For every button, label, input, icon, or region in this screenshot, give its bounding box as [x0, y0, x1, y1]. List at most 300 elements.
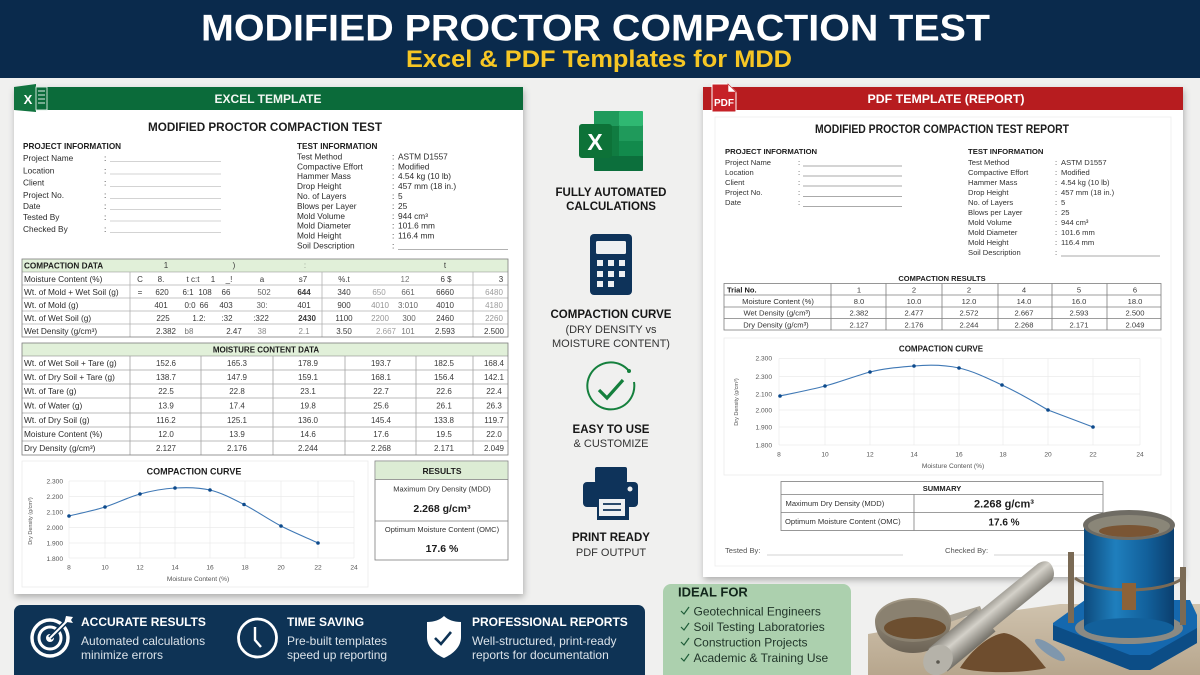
- moisture content table: 145.4: [371, 416, 392, 425]
- pdf project information: :: [798, 188, 800, 197]
- test information block: Compactive Effort: [297, 162, 363, 172]
- pdf test information: Soil Description: [968, 248, 1021, 257]
- pdf test information: Compactive Effort: [968, 168, 1029, 177]
- feature: compaction curve: [551, 234, 672, 350]
- benefit: time saving: [287, 615, 387, 662]
- pdf compaction results table: 2.572: [959, 308, 979, 318]
- pdf test information: Mold Diameter: [968, 228, 1018, 237]
- pdf test information: :: [1055, 178, 1057, 187]
- benefit: professional reports: reports for documentation: [472, 648, 609, 662]
- moisture content table: 25.6: [373, 402, 389, 410]
- rammer: [917, 561, 1054, 675]
- benefit: professional reports: [472, 615, 628, 662]
- compaction data table: 6 $: [440, 275, 452, 284]
- moisture content table: 22.8: [229, 387, 245, 396]
- chart: pdf compaction curve: 1.900: [755, 424, 772, 432]
- test information block: Modified: [398, 162, 430, 172]
- pdf compaction results table: Wet Density (g/cm³): [744, 308, 811, 318]
- moisture content table: 142.1: [484, 373, 505, 382]
- moisture content table: 138.7: [156, 373, 177, 382]
- compaction data table: 3: [499, 275, 504, 284]
- compaction data table: 300: [402, 314, 416, 323]
- compaction data table: 30:: [256, 301, 268, 310]
- compaction data table: Wt. of Wet Soil (g): [24, 313, 91, 323]
- moisture content table: 22.7: [373, 387, 389, 396]
- compaction data table: 2.382: [156, 327, 177, 336]
- feature: fully automated calculations: [556, 111, 666, 213]
- chart: excel compaction curve: 1.800: [46, 556, 63, 563]
- icon: printer: [583, 467, 638, 520]
- test information block: :: [392, 171, 394, 181]
- chart: excel compaction curve: 2.200: [46, 494, 63, 501]
- pdf test information: Mold Height: [968, 238, 1009, 247]
- compaction data table: %.t: [338, 275, 351, 284]
- pdf compaction results table: 2.244: [959, 320, 979, 330]
- compaction data table: 8.: [158, 275, 164, 284]
- pdf compaction results table: 5: [1077, 286, 1081, 294]
- compaction data table: ): [233, 261, 236, 270]
- moisture content table: 2.171: [434, 444, 455, 453]
- compaction data table: COMPACTION DATA: [24, 262, 103, 270]
- pdf compaction results table: 12.0: [962, 297, 976, 306]
- label: fully automated: FULLY AUTOMATED: [556, 187, 666, 199]
- pdf compaction results table: 6: [1133, 286, 1137, 294]
- project information block: Date: [23, 201, 41, 211]
- subtitle: Excel & PDF Templates for MDD: [406, 46, 792, 73]
- pdf test information: 5: [1061, 198, 1065, 207]
- moisture content table: [22, 343, 508, 455]
- compaction data table: b8: [185, 327, 194, 336]
- pdf project information: :: [798, 178, 800, 187]
- compaction data table: 620: [155, 288, 169, 297]
- pdf project information: Client: [725, 178, 745, 187]
- icon: target: [32, 616, 73, 656]
- moisture content table: 147.9: [227, 373, 248, 382]
- moisture content table: Moisture Content (%): [24, 429, 103, 439]
- chart: pdf compaction curve: 2.100: [755, 392, 772, 398]
- pdf test information: Blows per Layer: [968, 208, 1023, 217]
- project information block: Tested By: [23, 212, 60, 222]
- moisture content table: 168.1: [371, 373, 392, 382]
- excel panel header: EXCEL TEMPLATE: [214, 92, 322, 106]
- ideal for heading: IDEAL FOR: [678, 584, 748, 600]
- compaction data table: 661: [401, 288, 415, 297]
- compaction data table: 108: [198, 288, 212, 297]
- label: easy to use: & CUSTOMIZE: [574, 438, 648, 450]
- chart: pdf compaction curve: 2.300: [755, 356, 772, 362]
- project information block: :: [104, 153, 106, 163]
- pdf compaction results table: 2.667: [1014, 308, 1034, 318]
- chart: excel compaction curve: 20: [277, 564, 285, 572]
- pdf test information: :: [1055, 168, 1057, 177]
- project information block: Project No.: [23, 190, 64, 200]
- label: compaction curve: (DRY DENSITY vs: [565, 324, 657, 336]
- icon: clock: [238, 619, 276, 657]
- moisture content table: 182.5: [434, 359, 455, 368]
- moisture content table: MOISTURE CONTENT DATA: [213, 346, 319, 354]
- pdf compaction results table: 2.171: [1069, 320, 1089, 330]
- pdf signature lines: [725, 546, 1090, 555]
- pdf compaction results table: 10.0: [907, 297, 921, 306]
- moisture content table: Wt. of Tare (g): [24, 386, 77, 396]
- moisture content table: 133.8: [434, 416, 455, 425]
- pdf test information: :: [1055, 188, 1057, 197]
- moisture content table: 156.4: [434, 373, 455, 382]
- pdf panel header: PDF TEMPLATE (REPORT): [868, 92, 1025, 106]
- chart: excel compaction curve: 12: [136, 564, 144, 572]
- test information block: 944 cm³: [398, 211, 428, 221]
- pdf compaction results table: 8.0: [854, 297, 864, 306]
- moisture content table: 22.5: [158, 387, 174, 396]
- pdf compaction results table: 2.500: [1125, 308, 1145, 318]
- chart: pdf compaction curve: 12: [866, 452, 874, 458]
- moisture content table: 14.6: [300, 430, 316, 439]
- test information block: :: [392, 162, 394, 172]
- excel panel header: [14, 87, 523, 110]
- chart: excel compaction curve: 18: [241, 564, 249, 572]
- chart: excel compaction curve: 22: [314, 564, 322, 572]
- chart: pdf compaction curve: Moisture Content (%): [922, 463, 984, 470]
- label: print ready: PRINT READY: [572, 532, 650, 544]
- pdf signature lines: Tested By:: [725, 546, 760, 555]
- ideal for list: Soil Testing Laboratories: [694, 620, 825, 634]
- pdf test information: :: [1055, 198, 1057, 207]
- pdf compaction results table: 2.268: [1014, 320, 1034, 330]
- moisture content table: 125.1: [227, 416, 248, 425]
- chart: pdf compaction curve: 14: [910, 452, 918, 458]
- pdf test information: No. of Layers: [968, 198, 1013, 207]
- test information block: TEST INFORMATION: [297, 142, 377, 151]
- results box: 2.268 g/cm³: [413, 503, 471, 515]
- compaction data table: 2.667: [376, 327, 397, 336]
- compaction data table: 4010: [436, 301, 454, 310]
- project information block: Location: [23, 166, 55, 176]
- pdf test information: ASTM D1557: [1061, 158, 1107, 167]
- pdf test information: :: [1055, 248, 1057, 257]
- chart: excel compaction curve: 16: [206, 564, 214, 572]
- moisture content table: Wt. of Dry Soil + Tare (g): [24, 372, 115, 382]
- chart: excel compaction curve: [22, 461, 368, 587]
- compaction data table: 6:1: [182, 288, 194, 297]
- test information block: Hammer Mass: [297, 171, 351, 181]
- pdf test information: :: [1055, 218, 1057, 227]
- header banner: [0, 0, 1200, 78]
- compaction data table: 225: [156, 314, 170, 323]
- moisture content table: 13.9: [229, 430, 245, 439]
- ideal for list: [681, 604, 829, 665]
- test information block: :: [392, 191, 394, 201]
- results box: Optimum Moisture Content (OMC): [385, 525, 500, 534]
- test information block: 25: [398, 201, 408, 211]
- moisture content table: 159.1: [298, 373, 319, 382]
- feature: print ready: [572, 467, 650, 559]
- chart: pdf compaction curve: [724, 338, 1161, 475]
- test information block: Mold Diameter: [297, 220, 351, 230]
- pdf project information: :: [798, 158, 800, 167]
- benefits bar: [14, 605, 645, 675]
- test information block: Mold Volume: [297, 211, 345, 221]
- pdf compaction results table: [724, 274, 1161, 330]
- pdf test information: :: [1055, 208, 1057, 217]
- pdf compaction results table: 2.477: [904, 308, 924, 318]
- compaction data table: t c:t: [187, 275, 200, 284]
- pdf summary table: Optimum Moisture Content (OMC): [785, 517, 901, 526]
- benefit: time saving: speed up reporting: [287, 648, 387, 662]
- soil pile: [960, 633, 1046, 672]
- compaction data table: 2260: [485, 314, 503, 323]
- project information block: :: [104, 166, 106, 176]
- pdf project information: Date: [725, 198, 741, 207]
- compaction data table: 1100: [335, 314, 353, 323]
- chart: excel compaction curve: Moisture Content (%): [167, 576, 229, 583]
- pdf compaction results table: 1: [857, 286, 861, 294]
- pdf project information: PROJECT INFORMATION: [725, 147, 818, 156]
- chart: excel compaction curve: COMPACTION CURVE: [147, 466, 241, 476]
- pdf test information: 4.54 kg (10 lb): [1061, 178, 1110, 187]
- pdf test information: :: [1055, 238, 1057, 247]
- moisture content table: 168.4: [484, 359, 505, 368]
- test information block: Blows per Layer: [297, 201, 357, 211]
- test information block: 4.54 kg (10 lb): [398, 171, 451, 181]
- test information block: Test Method: [297, 152, 343, 162]
- compaction data table: 2430: [298, 314, 316, 323]
- results box: RESULTS: [422, 466, 462, 476]
- pdf test information: Modified: [1061, 168, 1090, 177]
- test information block: 101.6 mm: [398, 220, 435, 230]
- compaction data table: 2.47: [226, 327, 242, 336]
- chart: pdf compaction curve: Dry Density (g/cm³): [734, 378, 740, 426]
- pdf test information: 116.4 mm: [1061, 238, 1094, 247]
- chart: pdf compaction curve: 8: [777, 452, 781, 458]
- pdf compaction results table: 14.0: [1017, 297, 1031, 306]
- compaction data table: 502: [257, 288, 271, 297]
- compaction data table: :: [304, 261, 306, 270]
- compaction data table: 644: [297, 288, 311, 297]
- pdf test information: 944 cm³: [1061, 218, 1089, 227]
- label: print ready: [572, 532, 650, 559]
- compaction data table: Moisture Content (%): [24, 274, 103, 284]
- pdf test information: 457 mm (18 in.): [1061, 188, 1115, 197]
- pdf compaction results table: 18.0: [1128, 297, 1142, 306]
- chart: pdf compaction curve: 2.300: [755, 374, 772, 381]
- compaction data table: =: [138, 288, 143, 297]
- icon: excel logo: X: [587, 129, 603, 155]
- icon: calculator: [590, 234, 632, 295]
- moisture content table: 22.4: [486, 387, 502, 396]
- chart: excel compaction curve: 14: [171, 564, 179, 572]
- compaction data table: 6660: [436, 288, 454, 297]
- moisture content table: 19.5: [436, 430, 452, 439]
- compaction data table: 2.500: [484, 327, 505, 336]
- chart: excel compaction curve: Dry Density (g/cm³): [28, 497, 34, 545]
- moisture content table: Wt. of Dry Soil (g): [24, 415, 90, 425]
- compaction data table: 3.50: [336, 327, 352, 336]
- label: compaction curve: COMPACTION CURVE: [551, 309, 672, 321]
- moisture content table: 116.2: [156, 416, 176, 425]
- compaction data table: _!: [225, 275, 232, 284]
- icon: excel tab: X: [24, 92, 33, 107]
- pdf compaction results table: 2.176: [904, 320, 924, 330]
- chart: pdf compaction curve: COMPACTION CURVE: [899, 344, 984, 354]
- moisture content table: 19.8: [300, 402, 316, 410]
- ideal for list: Academic & Training Use: [694, 651, 829, 665]
- photo: proctor test equipment: [868, 510, 1200, 675]
- chart: excel compaction curve: 24: [350, 564, 358, 572]
- pdf project information: Project No.: [725, 188, 763, 197]
- moisture content table: 2.244: [298, 444, 319, 453]
- panel: pdf template: [703, 84, 1183, 577]
- pdf compaction results table: 4: [1022, 286, 1026, 294]
- compaction data table: 2.593: [435, 327, 456, 336]
- moisture content table: 2.049: [484, 444, 505, 453]
- benefit: professional reports: Well-structured, print-ready: [472, 634, 616, 648]
- compaction data table: 2.1: [298, 327, 310, 336]
- moisture content table: 22.0: [486, 430, 502, 439]
- pdf compaction results table: 2.049: [1125, 320, 1145, 330]
- project information block: :: [104, 224, 106, 234]
- pdf test information: TEST INFORMATION: [968, 147, 1044, 156]
- ideal for list: Geotechnical Engineers: [694, 604, 821, 618]
- compaction data table: 101: [401, 327, 415, 336]
- chart: pdf compaction curve: 20: [1044, 452, 1052, 458]
- icon: shield: [427, 616, 461, 658]
- label: compaction curve: [551, 309, 672, 350]
- pdf compaction results table: 2.127: [849, 320, 869, 330]
- pdf compaction results table: 16.0: [1072, 297, 1086, 306]
- chart: pdf compaction curve: 1.800: [755, 442, 772, 450]
- moisture content table: 12.0: [158, 430, 174, 439]
- test information block: 116.4 mm: [398, 230, 434, 240]
- compaction data table: 401: [297, 301, 311, 310]
- icon: pdf document: [712, 84, 736, 112]
- test information block: ASTM D1557: [398, 152, 448, 162]
- moisture content table: 136.0: [298, 416, 319, 425]
- project information block: :: [104, 201, 106, 211]
- compaction data table: :322: [253, 314, 269, 323]
- test information block: 457 mm (18 in.): [398, 181, 456, 191]
- compaction data table: 900: [337, 301, 351, 310]
- chart: excel compaction curve: 2.000: [46, 525, 63, 532]
- moisture content table: 178.9: [298, 359, 319, 368]
- test information block: 5: [398, 191, 403, 201]
- results box: 17.6 %: [426, 543, 459, 555]
- compaction data table: 401: [154, 301, 168, 310]
- moisture content table: 23.1: [300, 387, 316, 396]
- chart: pdf compaction curve: 18: [999, 452, 1007, 458]
- moisture content table: Dry Density (g/cm³): [24, 443, 96, 453]
- moisture content table: 17.6: [373, 430, 389, 439]
- pdf test information: [968, 147, 1160, 257]
- label: fully automated: [556, 187, 666, 213]
- compaction data table: 66: [200, 301, 209, 310]
- pdf compaction results table: 2: [967, 286, 971, 294]
- test information block: :: [392, 230, 394, 240]
- pdf summary table: 17.6 %: [988, 518, 1020, 528]
- test information block: [297, 142, 508, 250]
- blue stone: [1032, 636, 1068, 664]
- pdf test information: 101.6 mm: [1061, 228, 1095, 237]
- excel sheet title: MODIFIED PROCTOR COMPACTION TEST: [148, 120, 382, 134]
- test information block: :: [392, 220, 394, 230]
- chart: excel compaction curve: 2.300: [46, 478, 63, 486]
- pdf test information: 25: [1061, 208, 1069, 217]
- compaction data table: 1: [211, 275, 216, 284]
- moisture content table: 193.7: [371, 359, 392, 368]
- benefit: time saving: Pre-built templates: [287, 634, 387, 648]
- moisture content table: 152.6: [156, 359, 177, 368]
- pdf summary table: Maximum Dry Density (MDD): [786, 499, 885, 508]
- pdf compaction results table: Trial No.: [727, 286, 757, 294]
- compaction data table: [22, 259, 508, 337]
- chart: excel compaction curve: 8: [67, 564, 71, 572]
- compaction data table: 66: [222, 288, 231, 297]
- benefit: accurate results: ACCURATE RESULTS: [81, 615, 206, 629]
- icon: check circle: [587, 362, 634, 409]
- benefit: accurate results: [81, 615, 206, 662]
- results box: Maximum Dry Density (MDD): [393, 484, 491, 494]
- compaction data table: a: [260, 275, 265, 284]
- compaction data table: 340: [337, 288, 351, 297]
- scoop: [875, 598, 982, 653]
- pdf test information: :: [1055, 158, 1057, 167]
- pdf project information: :: [798, 168, 800, 177]
- pdf summary table: SUMMARY: [923, 484, 961, 493]
- pdf summary table: [781, 482, 1103, 530]
- compaction data table: C: [137, 275, 143, 284]
- moisture content table: 165.3: [227, 359, 248, 368]
- compaction data table: 4010: [371, 301, 389, 310]
- compaction data table: s7: [299, 275, 308, 284]
- compaction data table: 4180: [485, 301, 503, 310]
- compaction mold: [1068, 510, 1186, 644]
- pdf compaction results table: 2: [912, 286, 916, 294]
- compaction data table: 1: [164, 261, 169, 270]
- test information block: :: [392, 181, 394, 191]
- moisture content table: 2.127: [156, 444, 177, 453]
- compaction data table: 3:010: [398, 301, 419, 310]
- pdf signature lines: Checked By:: [945, 546, 988, 555]
- pdf project information: :: [798, 198, 800, 207]
- compaction data table: 2460: [436, 314, 454, 323]
- pdf test information: :: [1055, 228, 1057, 237]
- label: print ready: PDF OUTPUT: [576, 547, 646, 559]
- project information block: Checked By: [23, 224, 69, 234]
- pdf compaction results table: 2.382: [849, 308, 869, 318]
- label: compaction curve: MOISTURE CONTENT): [552, 338, 670, 350]
- project information block: :: [104, 212, 106, 222]
- benefit: accurate results: minimize errors: [81, 648, 163, 662]
- compaction data table: 0:0: [184, 301, 196, 310]
- moisture content table: 2.176: [227, 444, 248, 453]
- pdf test information: Hammer Mass: [968, 178, 1018, 187]
- moisture content table: 13.9: [158, 402, 174, 410]
- moisture content table: 26.3: [486, 402, 502, 410]
- chart: excel compaction curve: 1.900: [46, 540, 63, 548]
- test information block: :: [392, 152, 394, 162]
- moisture content table: 2.268: [371, 444, 392, 453]
- chart: excel compaction curve: 2.100: [46, 510, 63, 516]
- label: easy to use: EASY TO USE: [573, 424, 650, 436]
- pdf compaction results table: COMPACTION RESULTS: [898, 274, 986, 283]
- pdf compaction results table: Moisture Content (%): [742, 297, 814, 306]
- benefit: time saving: TIME SAVING: [287, 615, 364, 629]
- label: fully automated: CALCULATIONS: [566, 201, 656, 213]
- project information block: [23, 142, 221, 234]
- pdf compaction results table: 2.593: [1069, 308, 1089, 318]
- compaction data table: t: [444, 261, 447, 270]
- project information block: Project Name: [23, 153, 74, 163]
- moisture content table: 22.6: [436, 387, 452, 396]
